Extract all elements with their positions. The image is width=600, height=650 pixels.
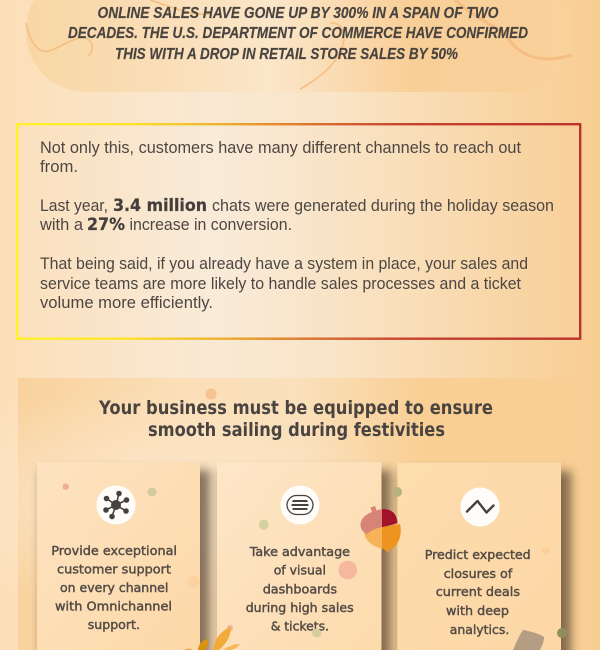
paragraph 2: increase in conversion.	[130, 216, 292, 234]
top banner	[26, 0, 574, 92]
cylinder decoration	[513, 630, 544, 650]
section panel	[0, 378, 580, 650]
paragraph 3	[40, 255, 528, 312]
paragraph 2: 3.4 million	[113, 196, 207, 215]
banner shape	[26, 0, 574, 92]
paragraph 2: chats were generated during the holiday season	[212, 197, 554, 215]
gradient bordered text panel	[17, 124, 580, 339]
card 1 text: on every channel	[60, 581, 168, 596]
section background	[18, 378, 580, 650]
card 3 text: with deep	[446, 604, 509, 619]
paragraph 2: 27%	[87, 215, 125, 234]
paragraph 2: with a	[39, 216, 83, 234]
paragraph 3: volume more efficiently.	[40, 294, 213, 312]
decorative dots	[62, 388, 567, 638]
card 2	[217, 462, 391, 650]
card 3 text	[425, 548, 531, 638]
icon: acorn	[360, 506, 401, 553]
icon: network hub	[96, 486, 136, 524]
paragraph 2: Last year,	[40, 197, 108, 215]
paragraph 1: Not only this, customers have many different channels to reach out	[40, 139, 521, 157]
card 1 text: Provide exceptional	[51, 544, 177, 559]
icon: dashboard list	[280, 486, 320, 524]
card 2 text: during high sales	[246, 601, 354, 616]
card 1	[37, 462, 210, 650]
card 1 text: support.	[88, 618, 140, 633]
paragraph 3: That being said, if you already have a system in place, your sales and	[40, 255, 528, 273]
card 2 text: of visual	[274, 564, 326, 579]
panel background and border	[17, 124, 580, 339]
card 1 text: with Omnichannel	[55, 600, 172, 615]
card 1 text	[51, 544, 177, 633]
card 2 text	[246, 545, 354, 635]
card 2 text: Take advantage	[249, 545, 350, 560]
paragraph 2	[39, 196, 554, 234]
card 3	[397, 463, 571, 650]
paragraph 1: from.	[40, 158, 78, 176]
section heading: smooth sailing during festivities	[148, 419, 445, 441]
card 2 text: & tickets.	[271, 620, 329, 635]
paragraph 1	[40, 139, 521, 176]
leaf decoration	[185, 627, 240, 650]
card 2 text: dashboards	[263, 583, 337, 598]
banner text: THIS WITH A DROP IN RETAIL STORE SALES BY 50%	[115, 46, 458, 63]
card 1 text: customer support	[57, 562, 171, 577]
section heading: Your business must be equipped to ensure	[98, 397, 493, 419]
card 3 text: analytics.	[450, 623, 509, 638]
card 3 text: closures of	[444, 567, 513, 582]
banner text	[68, 5, 528, 63]
banner text: DECADES. THE U.S. DEPARTMENT OF COMMERCE HAVE CONFIRMED	[68, 25, 528, 42]
icon: trend line	[460, 488, 500, 526]
card 3 text: current deals	[436, 585, 520, 600]
section heading	[98, 397, 493, 441]
card 3 text: Predict expected	[425, 548, 531, 563]
banner swirls	[26, 0, 572, 89]
banner text: ONLINE SALES HAVE GONE UP BY 300% IN A SPAN OF TWO	[98, 5, 498, 22]
paragraph 3: service teams are more likely to handle sales processes and a ticket	[40, 275, 521, 293]
